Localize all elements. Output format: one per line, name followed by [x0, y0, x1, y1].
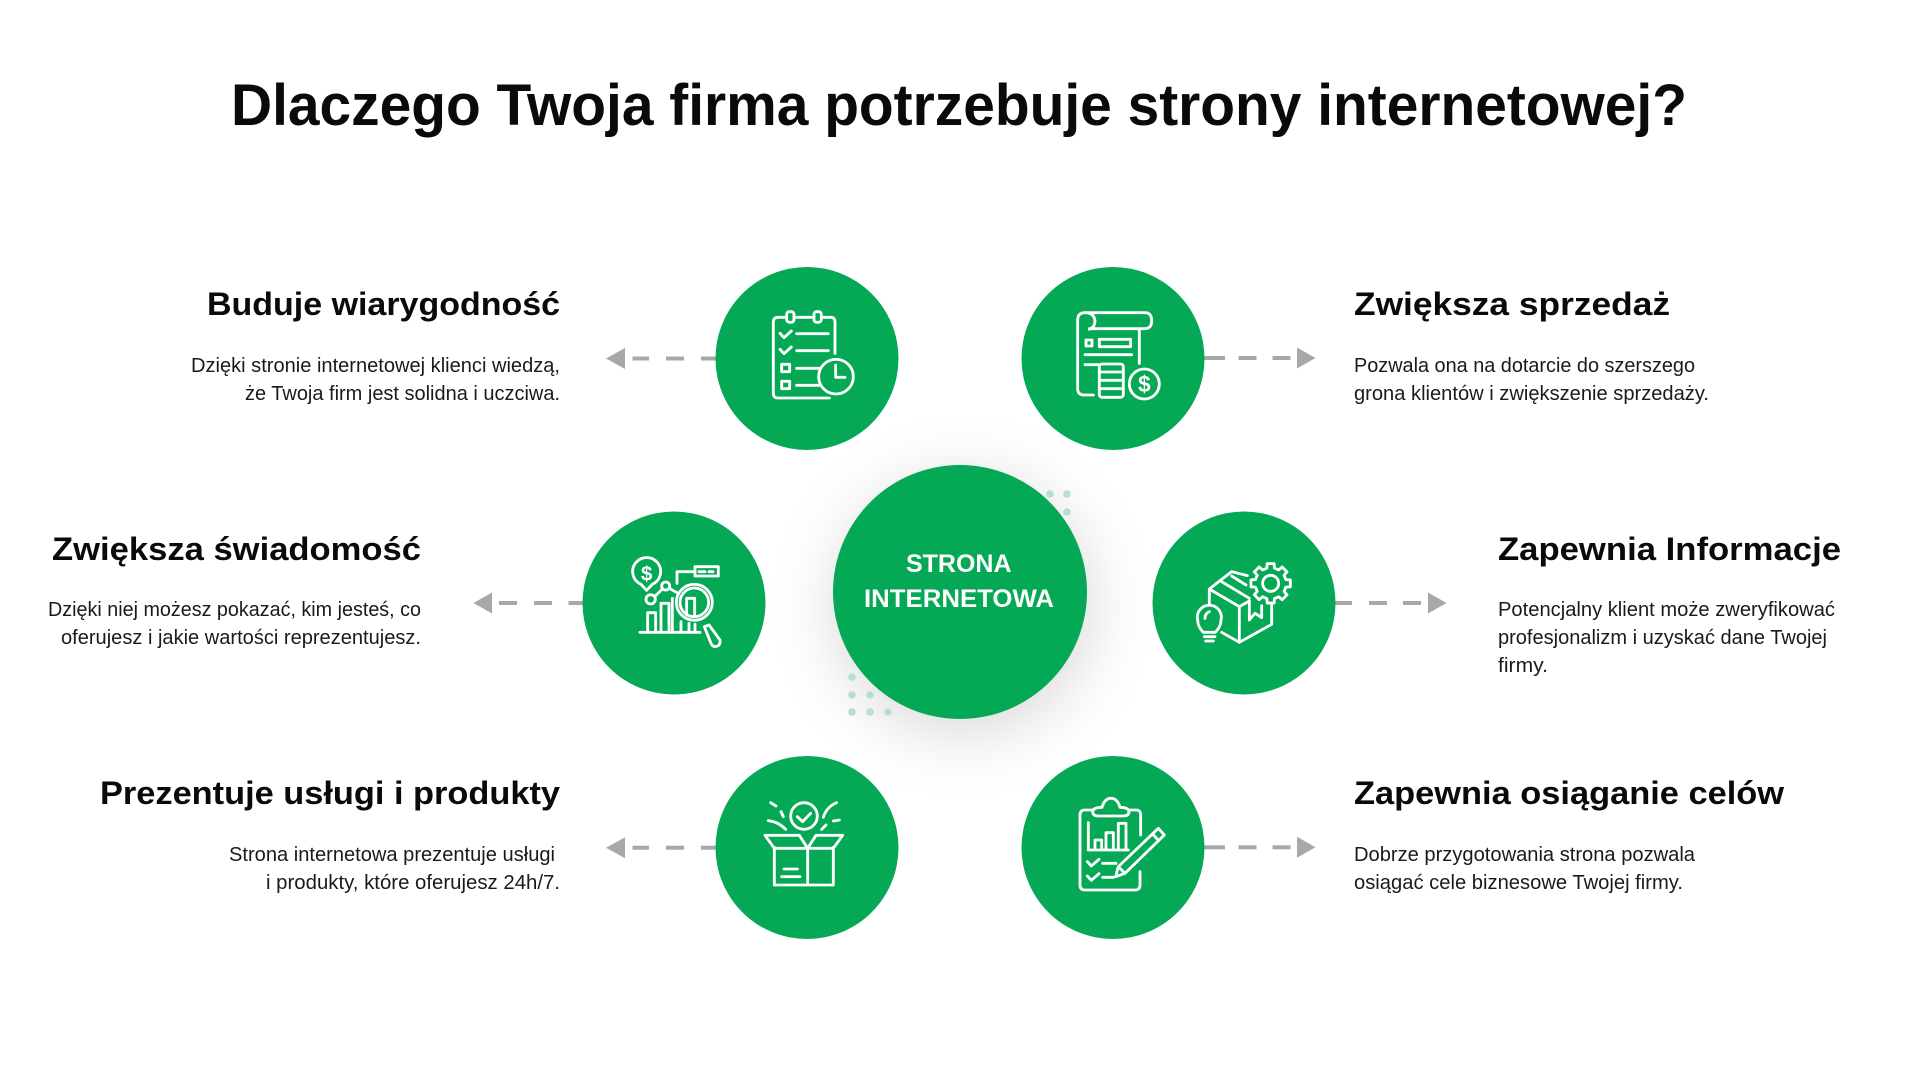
heading: Zapewnia Informacje — [1498, 531, 1841, 567]
description: Dzięki stronie internetowej klienci wiedzą, — [191, 355, 560, 377]
central label — [864, 550, 1054, 613]
arrow — [606, 837, 717, 858]
circle — [1022, 267, 1204, 450]
circle — [1022, 756, 1204, 939]
icon: box with gear and bulb — [1197, 564, 1290, 642]
circle — [716, 267, 898, 450]
panel: Zapewnia osiąganie celów — [1022, 756, 1784, 939]
icon: checklist with clock — [773, 312, 853, 398]
description — [229, 844, 560, 894]
description: Strona internetowa prezentuje usługi — [229, 844, 555, 866]
title: Dlaczego Twoja firma potrzebuje strony internetowej? — [231, 73, 1687, 138]
panel: Zwiększa świadomość — [48, 512, 766, 694]
description: osiągać cele biznesowe Twojej firmy. — [1354, 872, 1683, 894]
arrow — [606, 348, 717, 369]
arrow — [474, 592, 584, 614]
description: grona klientów i zwiększenie sprzedaży. — [1354, 383, 1709, 405]
circle — [716, 756, 898, 939]
heading: Zapewnia osiąganie celów — [1354, 775, 1784, 811]
description — [1498, 599, 1835, 677]
description — [191, 355, 560, 405]
central label: STRONA — [906, 550, 1012, 578]
description: oferujesz i jakie wartości reprezentujesz. — [61, 627, 421, 649]
arrow — [1335, 592, 1446, 614]
description: Dzięki niej możesz pokazać, kim jesteś, co — [48, 599, 421, 621]
description: firmy. — [1498, 655, 1548, 677]
panel: Prezentuje usługi i produkty — [100, 756, 898, 939]
panel: Zapewnia Informacje — [1152, 512, 1841, 694]
icon: invoice with coins: $ — [1138, 371, 1151, 397]
heading: Zwiększa sprzedaż — [1354, 286, 1670, 322]
description: Dobrze przygotowania strona pozwala — [1354, 844, 1696, 866]
description: i produkty, które oferujesz 24h/7. — [266, 872, 560, 894]
description: Pozwala ona na dotarcie do szerszego — [1354, 355, 1695, 377]
heading: Buduje wiarygodność — [207, 286, 560, 322]
description — [1354, 355, 1709, 405]
central hub — [833, 465, 1087, 719]
description — [1354, 844, 1696, 894]
panel: Zwiększa sprzedaż — [1022, 267, 1709, 450]
icon: analytics with magnifier — [633, 558, 720, 647]
icon: open box with checkmark — [765, 803, 843, 885]
central circle — [833, 465, 1087, 719]
shadow of central circle — [835, 478, 1091, 734]
arrow — [1204, 348, 1316, 368]
arrow — [1204, 837, 1316, 858]
panel: Buduje wiarygodność — [191, 267, 898, 450]
icon: invoice with coins — [1078, 313, 1159, 399]
icon: clipboard with pencil — [1080, 798, 1164, 890]
decorative dots upper right — [1046, 490, 1071, 516]
heading: Zwiększa świadomość — [52, 531, 421, 567]
icon: analytics with magnifier: $ — [641, 562, 653, 585]
description: Potencjalny klient może zweryfikować — [1498, 599, 1835, 621]
heading: Prezentuje usługi i produkty — [100, 775, 560, 811]
circle — [1152, 512, 1336, 694]
decorative dots lower left — [848, 673, 892, 716]
central label: INTERNETOWA — [864, 585, 1054, 613]
description — [48, 599, 421, 649]
circle — [582, 512, 766, 694]
description: profesjonalizm i uzyskać dane Twojej — [1498, 627, 1827, 649]
description: że Twoja firm jest solidna i uczciwa. — [245, 383, 560, 405]
